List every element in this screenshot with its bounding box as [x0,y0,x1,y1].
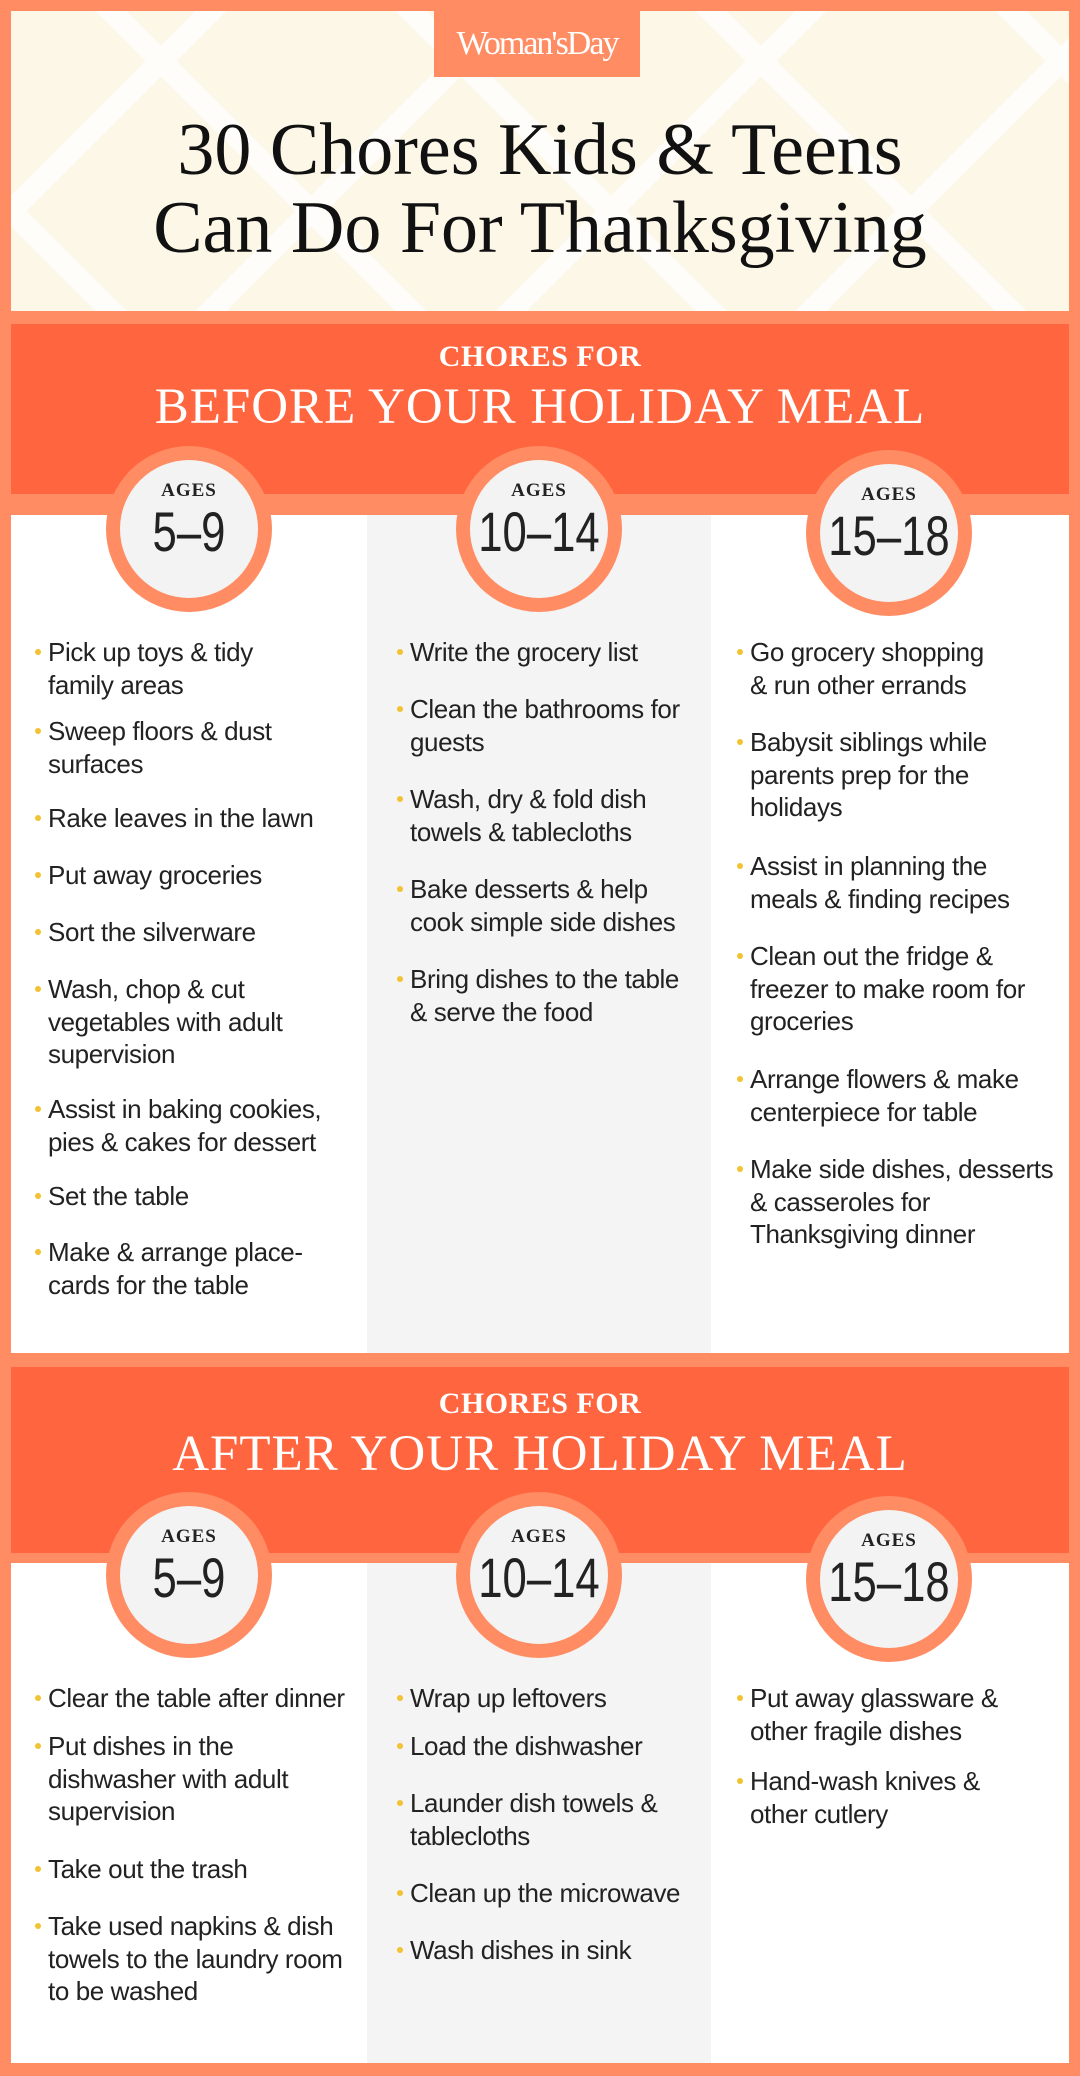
text: Wash dishes in sink [410,1935,631,1965]
text: cook simple side dishes [410,906,675,936]
text: Clear the table after dinner [48,1683,345,1713]
header panel [11,11,1069,311]
text: dishwasher with adult [48,1764,288,1794]
list: before 5-9 [35,637,321,1300]
text: Take out the trash [48,1854,247,1884]
text: Put away groceries [48,860,262,890]
circle: after ages 15-18: AGES [861,1530,917,1551]
section header: after [11,1367,1069,1553]
circle: ages 15-18: 15–18 [828,504,950,567]
text: family areas [48,670,183,700]
text: Clean up the microwave [410,1878,680,1908]
section header: before: CHORES FOR [439,340,641,373]
circle: ages 5-9: AGES [161,480,217,501]
text: Launder dish towels & [410,1788,657,1818]
circle: after ages 15-18: 15–18 [828,1550,950,1613]
text: & serve the food [410,996,593,1026]
circle: ages 5-9 [106,446,272,612]
logo: Woman'sDay [457,25,617,62]
title [153,109,927,269]
text: Wash, dry & fold dish [410,784,646,814]
text: Assist in baking cookies, [48,1094,321,1124]
text: centerpiece for table [750,1096,977,1126]
text: vegetables with adult [48,1006,282,1036]
list: after 15-18 [737,1683,998,1828]
text: meals & finding recipes [750,884,1010,914]
circle: after ages 5-9 [106,1492,272,1658]
text: surfaces [48,748,143,778]
text: supervision [48,1796,175,1826]
circle: after ages 5-9: 5–9 [153,1546,225,1609]
text: supervision [48,1039,175,1069]
circle: after ages 10-14 [456,1492,622,1658]
circle: after ages 10-14: 10–14 [478,1546,600,1609]
text: Make & arrange place- [48,1237,303,1267]
text: Bake desserts & help [410,874,648,904]
columns: before [11,515,1069,1353]
text: & casseroles for [750,1186,930,1216]
section header: before: BEFORE YOUR HOLIDAY MEAL [155,379,925,435]
circle: ages 5-9: 5–9 [153,500,225,563]
text: to be washed [48,1976,198,2006]
list: before 10-14 [397,637,680,1026]
circle: ages 15-18 [806,450,972,616]
text: tablecloths [410,1820,530,1850]
text: Sweep floors & dust [48,716,272,746]
text: Pick up toys & tidy [48,637,253,667]
section header: after: CHORES FOR [439,1387,641,1420]
text: holidays [750,792,842,822]
text: Put away glassware & [750,1683,998,1713]
text: Babysit siblings while [750,727,987,757]
circle: after ages 10-14: AGES [511,1526,567,1547]
text: towels to the laundry room [48,1944,343,1974]
text: towels & tablecloths [410,816,632,846]
text: groceries [750,1006,853,1036]
circle: ages 10-14: AGES [511,480,567,501]
columns: after [11,1563,1069,2063]
text: Wrap up leftovers [410,1683,606,1713]
text: Hand-wash knives & [750,1766,980,1796]
text: Thanksgiving dinner [750,1219,975,1249]
title: 30 Chores Kids & Teens [177,109,903,191]
text: Wash, chop & cut [48,974,244,1004]
text: Bring dishes to the table [410,964,679,994]
text: parents prep for the [750,760,969,790]
list: after 10-14 [397,1683,680,1965]
text: other fragile dishes [750,1716,962,1746]
text: Sort the silverware [48,917,256,947]
text: Clean the bathrooms for [410,694,680,724]
text: cards for the table [48,1270,249,1300]
text: & run other errands [750,670,966,700]
circle: ages 15-18: AGES [861,484,917,505]
text: Assist in planning the [750,851,987,881]
section header: before [11,324,1069,494]
text: Take used napkins & dish [48,1911,333,1941]
list: before 15-18 [737,637,1053,1249]
circle: ages 10-14 [456,446,622,612]
text: Make side dishes, desserts [750,1154,1053,1184]
text: Put dishes in the [48,1731,233,1761]
circle: after ages 5-9: AGES [161,1526,217,1547]
section header: after: AFTER YOUR HOLIDAY MEAL [172,1426,908,1482]
text: Arrange flowers & make [750,1064,1019,1094]
title: Can Do For Thanksgiving [153,187,927,269]
text: Go grocery shopping [750,637,984,667]
text: freezer to make room for [750,974,1025,1004]
text: other cutlery [750,1798,888,1828]
logo [434,11,640,77]
circle: ages 10-14: 10–14 [478,500,600,563]
text: pies & cakes for dessert [48,1126,316,1156]
text: Load the dishwasher [410,1731,642,1761]
text: Write the grocery list [410,637,638,667]
text: Rake leaves in the lawn [48,803,313,833]
list: after 5-9 [35,1683,345,2006]
text: Clean out the fridge & [750,941,993,971]
text: guests [410,726,484,756]
text: Set the table [48,1181,189,1211]
circle: after ages 15-18 [806,1496,972,1662]
